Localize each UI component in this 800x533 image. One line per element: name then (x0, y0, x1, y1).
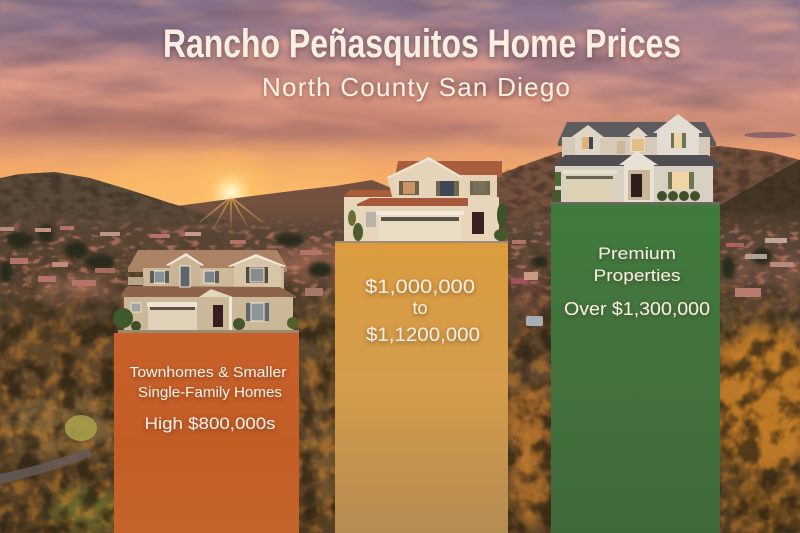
sun (183, 145, 279, 241)
icon: grey-roof house on green bar (551, 114, 720, 204)
background: sunset sky (0, 0, 800, 215)
price: high 800,000s: High $800,000s (144, 414, 276, 433)
panel: gold price bar, one million range (335, 243, 508, 533)
icon: tan house on orange bar (113, 250, 299, 333)
price: to: to (412, 298, 428, 318)
label: premium: Premium (598, 244, 676, 263)
title: Rancho Peñasquitos Home Prices (163, 22, 681, 66)
price: lower bound: $1,000,000 (365, 276, 475, 298)
hillside neighbourhood and chaparral (0, 205, 800, 533)
pink rooftops in the neighbourhood (0, 226, 794, 297)
label: townhomes and smaller homes: Townhomes & Smaller (130, 364, 286, 381)
subtitle: North County San Diego (262, 72, 570, 102)
label: properties: Properties (594, 266, 680, 285)
dark trees among the houses (0, 224, 772, 283)
sun rays (200, 197, 262, 228)
label: single-family homes: Single-Family Homes (138, 384, 282, 401)
price: upper bound: $1,1200,000 (366, 324, 480, 346)
panel: green price bar, premium properties (551, 204, 720, 533)
icon: terracotta-roof house on gold bar (335, 157, 508, 243)
distant mountains (0, 146, 800, 260)
price: over 1,300,000: Over $1,300,000 (564, 299, 710, 319)
panel: orange price bar, townhomes (114, 333, 299, 533)
